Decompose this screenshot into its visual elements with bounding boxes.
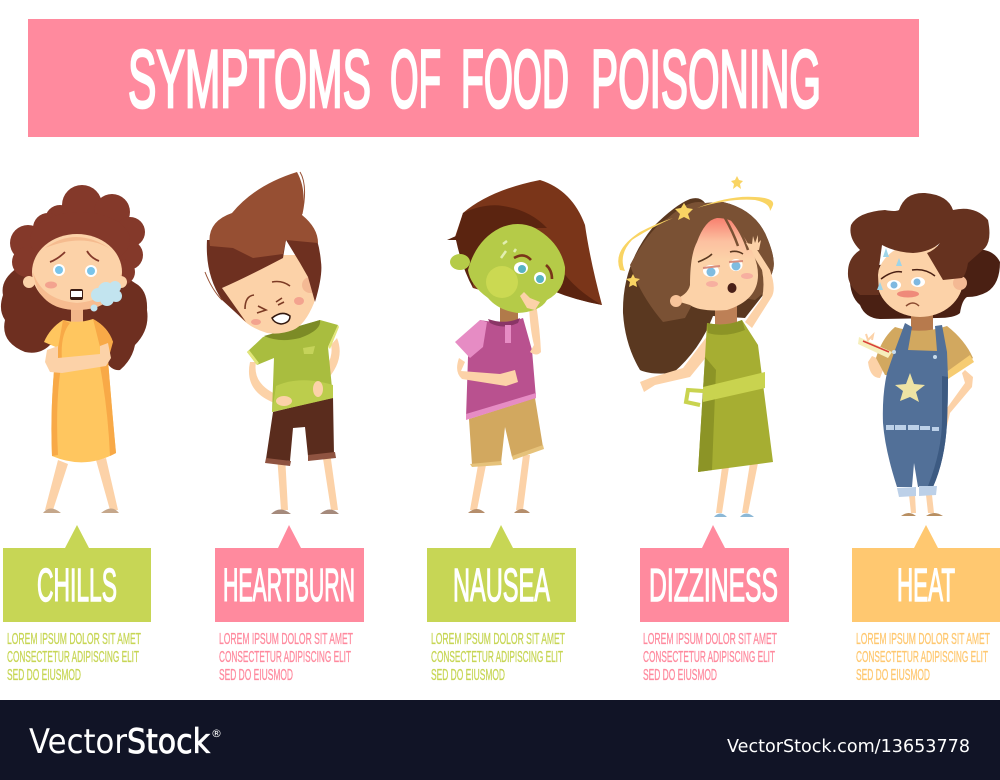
legs [909,495,934,513]
cheeks [45,282,57,288]
description: heartburn: CONSECTETUR ADIPISCING ELIT [219,649,351,666]
frown [906,303,919,306]
label: heat [852,525,1000,622]
footer logo: Stock [127,722,210,762]
label: nausea: NAUSEA [453,559,550,611]
arms [640,245,774,392]
description: chills [7,631,141,684]
brows [698,251,743,262]
neck [911,312,933,332]
closed eyes [245,282,290,313]
belt [703,372,765,402]
face [32,234,122,310]
footer url: VectorStock.com/13653778 [727,736,970,757]
eyes [53,264,97,277]
label: nausea [427,525,576,622]
label: dizziness [640,525,789,622]
arms [868,356,973,426]
label: heartburn [215,525,364,622]
legs [277,452,338,510]
cuffs [897,486,937,497]
description: heat [856,631,990,684]
title banner [28,19,919,137]
shoes [901,513,943,516]
neck [715,305,737,327]
hair top [848,193,989,295]
shorts [469,398,543,465]
character: boy with heartburn [205,172,340,514]
face [673,218,758,310]
face [222,255,315,334]
hair strands [725,218,748,250]
hand on head [746,235,761,250]
sweat [877,248,902,290]
description: nausea: SED DO EIUSMOD [431,667,505,684]
legs [716,463,758,513]
belt loop [686,390,703,405]
eyes [887,277,925,290]
dress [44,319,116,462]
label: dizziness: DIZZINESS [649,559,778,611]
shirt [876,326,973,378]
cuffs [265,452,336,466]
ears [23,276,127,288]
description: heartburn [219,631,353,684]
description: nausea [431,631,565,684]
dress [698,320,773,472]
mouth [272,313,290,324]
hair dark underside [207,240,321,322]
character: boy with nausea [447,180,602,513]
description: dizziness [643,631,777,684]
description: nausea: LOREM IPSUM DOLOR SIT AMET [431,631,565,648]
description: nausea: CONSECTETUR ADIPISCING ELIT [431,649,563,666]
cheeks [706,273,753,287]
mouth [728,283,736,293]
footer logo: ® [211,727,222,740]
eyes [514,262,546,284]
footer logo [29,722,222,762]
description: dizziness: LOREM IPSUM DOLOR SIT AMET [643,631,777,648]
legs [45,458,118,510]
eyes [703,259,743,277]
buttons [505,325,511,343]
description: heartburn: SED DO EIUSMOD [219,667,293,684]
crossed arms [45,343,111,373]
label: chills [3,525,151,622]
footer bar [0,700,1000,780]
shoes [468,509,530,513]
hair back [623,198,774,374]
cheeks [251,297,304,325]
hand over mouth [520,292,540,310]
brows [50,251,99,262]
buttons [892,350,937,359]
shoes [43,508,119,513]
description: heat: SED DO EIUSMOD [856,667,930,684]
thermometer [858,334,892,358]
character: girl with heat [848,193,1000,516]
character: girl with dizziness [618,176,774,517]
shirt [247,320,338,412]
legs [470,455,530,510]
description: dizziness: SED DO EIUSMOD [643,667,717,684]
hair top [209,172,318,258]
back hair [1,260,147,370]
arms [457,303,541,386]
neck [500,305,518,323]
label: chills: CHILLS [37,559,117,611]
star [895,373,925,402]
belt strips [886,425,939,431]
forehead shade [45,237,112,250]
puffed cheek [486,266,518,298]
hair dark [850,249,1000,319]
description: chills: CONSECTETUR ADIPISCING ELIT [7,649,139,666]
title: OF [390,34,441,125]
character: girl with chills [1,185,147,513]
hair front [630,202,774,322]
title: SYMPTOMS [128,34,371,125]
right cuff [945,355,974,379]
neck [71,305,83,325]
shoes [714,514,754,517]
footer logo: Vector [29,722,127,762]
brows [881,270,935,279]
sleeve [455,320,487,358]
halo [618,197,773,271]
face [468,224,565,313]
description: chills: LOREM IPSUM DOLOR SIT AMET [7,631,141,648]
title [128,34,821,125]
mouth [70,289,83,300]
shirt [466,318,536,418]
shoes [271,510,339,514]
hands [276,381,323,406]
stars [626,176,743,287]
description: chills: SED DO EIUSMOD [7,667,81,684]
breath cloud [90,281,122,312]
brows [514,255,552,279]
arms [249,338,340,408]
face [877,243,963,317]
red nose [897,290,919,298]
front hair [10,185,145,285]
hair [455,180,602,305]
title: FOOD [461,34,569,125]
description: dizziness: CONSECTETUR ADIPISCING ELIT [643,649,775,666]
sweat drops [501,241,516,258]
shorts [266,397,334,461]
overalls [883,323,948,487]
ear [670,295,682,307]
infographic canvas: HEARTBURN [223,559,355,611]
ear [450,254,470,270]
description: heartburn: LOREM IPSUM DOLOR SIT AMET [219,631,353,648]
